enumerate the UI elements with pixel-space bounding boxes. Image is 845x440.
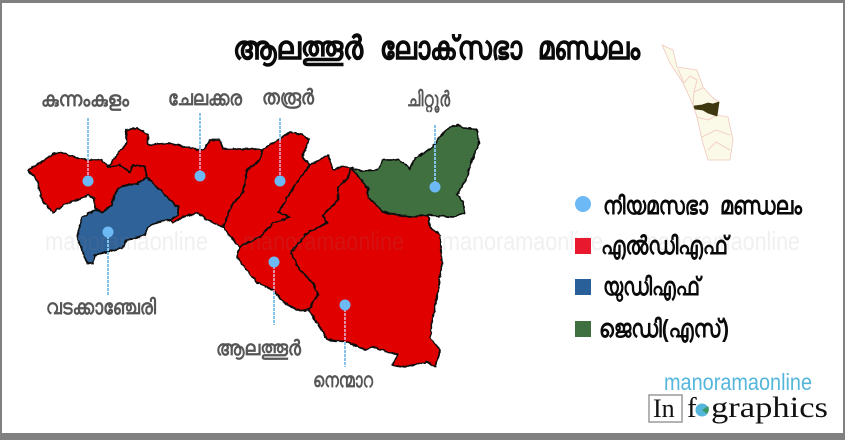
legend item: JD(S): ജെഡി(എസ്)	[599, 315, 729, 343]
label: Alathur: ആലത്തൂർ	[216, 337, 302, 361]
region: Kunnamkulam	[28, 152, 147, 213]
label: Chittur: ചിറ്റൂർ	[407, 87, 451, 113]
marker: Wadakkanchery	[102, 226, 114, 295]
marker: Alathur	[268, 256, 280, 325]
logo box: In: In	[653, 394, 675, 423]
watermarks	[45, 226, 800, 256]
marker: Kunnamkulam	[82, 118, 94, 186]
watermarks: manoramaonline	[442, 226, 603, 256]
locator map: highlighted constituency	[694, 102, 719, 116]
legend item: UDF: യുഡിഎഫ്	[603, 273, 703, 303]
legend item: assembly constituency: മണ്ഡലം	[720, 192, 802, 220]
place labels	[41, 86, 451, 392]
locator map: Kerala	[662, 45, 733, 160]
watermarks: manoramaonline	[640, 226, 800, 256]
region: Chelakkara	[108, 128, 263, 227]
logo box: In	[649, 394, 682, 423]
label: Kunnamkulam: കുന്നംകുളം	[41, 88, 130, 111]
region: Chittur	[351, 125, 479, 217]
logo: manoramaonline infographics	[649, 369, 828, 424]
label: Chelakkara: ചേലക്കര	[168, 87, 243, 110]
watermarks: manoramaonline	[45, 226, 208, 256]
marker: Tarur	[274, 118, 286, 186]
legend item: UDF	[575, 273, 703, 303]
logo text: fographics: graphics	[711, 391, 828, 424]
label: Tarur: തരൂർ	[262, 86, 315, 110]
marker: Chittur	[430, 125, 440, 192]
watermarks: manoramaonline	[243, 226, 404, 256]
legend	[575, 192, 802, 343]
logo text: fographics: f	[687, 392, 697, 424]
marker: Nemmara	[340, 300, 350, 367]
legend item: assembly constituency	[575, 192, 802, 220]
title: മണ്ഡലം	[538, 30, 640, 66]
region: Alathur	[237, 155, 351, 310]
label: Nemmara: നെന്മാറ	[313, 369, 374, 392]
title: ആലത്തൂർ	[233, 30, 364, 67]
title: ലോക്‌സഭാ	[380, 30, 523, 66]
region: Nemmara	[291, 168, 442, 367]
region: Tarur	[223, 132, 310, 247]
marker: Chelakkara	[194, 113, 206, 182]
legend item: LDF: എൽഡിഎഫ്	[601, 232, 731, 260]
constituency map	[28, 125, 479, 367]
region: Wadakkanchery	[77, 177, 178, 263]
title	[233, 30, 640, 67]
legend item: assembly constituency: നിയമസഭാ	[603, 192, 709, 220]
label: Wadakkanchery: വടക്കാഞ്ചേരി	[46, 295, 156, 319]
logo wordmark: manoramaonline	[664, 369, 812, 395]
